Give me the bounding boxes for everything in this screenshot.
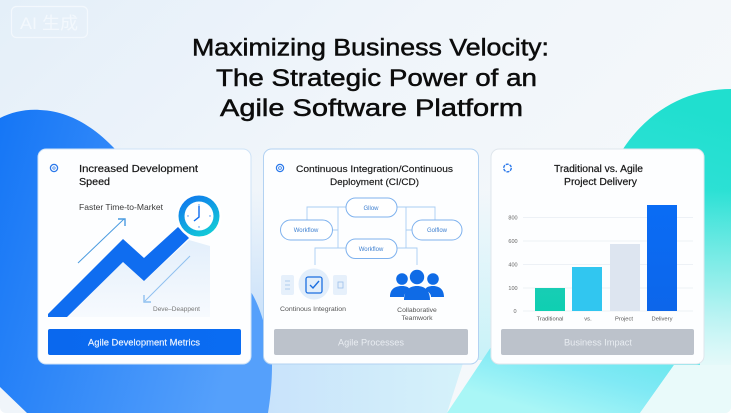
workflow node labels: Gllow: [363, 206, 379, 212]
y axis labels: 400: [508, 262, 518, 268]
label: collaborative teamwork: Teamwork: [402, 315, 433, 322]
workflow node labels: Golflow: [427, 228, 448, 234]
panel heading: [79, 164, 198, 188]
label: continuous integration: Continous Integration: [280, 306, 346, 313]
panel heading: [554, 164, 643, 188]
title: Agile Software Platform: [220, 95, 523, 122]
bars: [535, 205, 677, 311]
icon: clock: [176, 193, 222, 239]
label: faster time-to-market: Faster Time-to-Market: [79, 202, 164, 212]
workflow nodes: [280, 198, 462, 258]
y axis labels: 0: [513, 309, 517, 315]
panel: CI/CD: [264, 149, 478, 364]
label: development: Deve–Deappent: [153, 307, 200, 313]
panel heading: Continuous Integration/Continuous: [296, 164, 453, 175]
watermark: AI generated: [12, 6, 88, 38]
workflow connectors: [307, 207, 435, 265]
y axis labels: 600: [508, 239, 518, 245]
growth line: [48, 227, 189, 317]
arrow: down: [144, 256, 190, 302]
button: agile development metrics: [48, 329, 241, 355]
button: agile development metrics: Agile Development Metrics: [88, 338, 200, 348]
title: Maximizing Business Velocity:: [192, 34, 549, 62]
y axis labels: 800: [508, 216, 518, 222]
panel: increased development speed: [38, 149, 251, 364]
panel: traditional vs agile: [491, 149, 704, 364]
x axis labels: Traditional: [537, 316, 563, 322]
panel heading: [296, 164, 453, 188]
workflow node labels: [294, 206, 448, 253]
x axis labels: vs.: [584, 316, 592, 322]
icon: continuous integration: [281, 268, 347, 300]
icon: team: [390, 270, 444, 300]
button: agile processes: Agile Processes: [338, 338, 404, 348]
arrow: up: [78, 219, 125, 263]
panel heading: Speed: [79, 177, 110, 188]
panel heading: Increased Development: [79, 164, 198, 175]
x axis labels: Project: [615, 316, 633, 322]
workflow node labels: Workflow: [359, 247, 384, 253]
title: The Strategic Power of an: [216, 65, 537, 92]
button: agile processes: [274, 329, 468, 355]
y axis labels: 100: [508, 286, 518, 292]
button: business impact: [501, 329, 694, 355]
label: collaborative teamwork: Collaborative: [397, 307, 437, 314]
watermark: AI generated: AI 生成: [20, 14, 78, 33]
panel heading: Deployment (CI/CD): [330, 177, 419, 188]
icon: gear: [504, 164, 511, 172]
label: collaborative teamwork: [397, 307, 437, 322]
icon: gear: [50, 164, 58, 172]
button: business impact: Business Impact: [564, 338, 632, 348]
workflow node labels: Workflow: [294, 228, 319, 234]
title: [192, 34, 549, 122]
panel heading: Traditional vs. Agile: [554, 164, 643, 175]
y axis labels: [508, 216, 518, 315]
bar chart: [508, 205, 693, 322]
x axis labels: [537, 316, 673, 322]
x axis labels: Delivery: [652, 316, 673, 322]
panel heading: Project Delivery: [564, 177, 637, 188]
area under growth line: [67, 240, 210, 317]
icon: gear: [276, 164, 284, 172]
